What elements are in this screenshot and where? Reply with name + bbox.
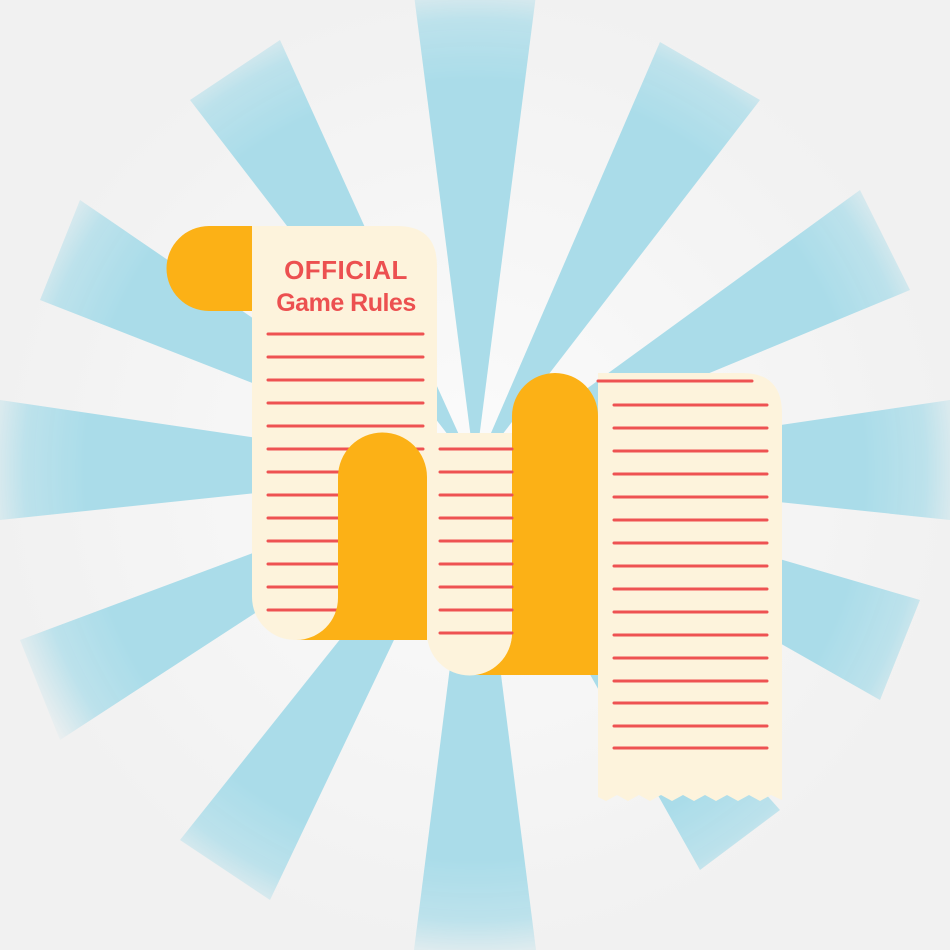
fold 1 orange bbox=[296, 432, 427, 640]
heading: Game Rules bbox=[276, 289, 416, 317]
heading bbox=[276, 255, 416, 317]
scroll 1: official rules sheet bbox=[167, 226, 437, 640]
scroll 3: long sheet with torn bottom bbox=[598, 373, 782, 801]
roll curl top-left bbox=[167, 226, 252, 311]
fold 2 orange bbox=[470, 373, 598, 675]
scroll 2: middle sheet bbox=[427, 433, 512, 676]
heading: OFFICIAL bbox=[284, 255, 408, 285]
rule lines bbox=[268, 334, 423, 610]
